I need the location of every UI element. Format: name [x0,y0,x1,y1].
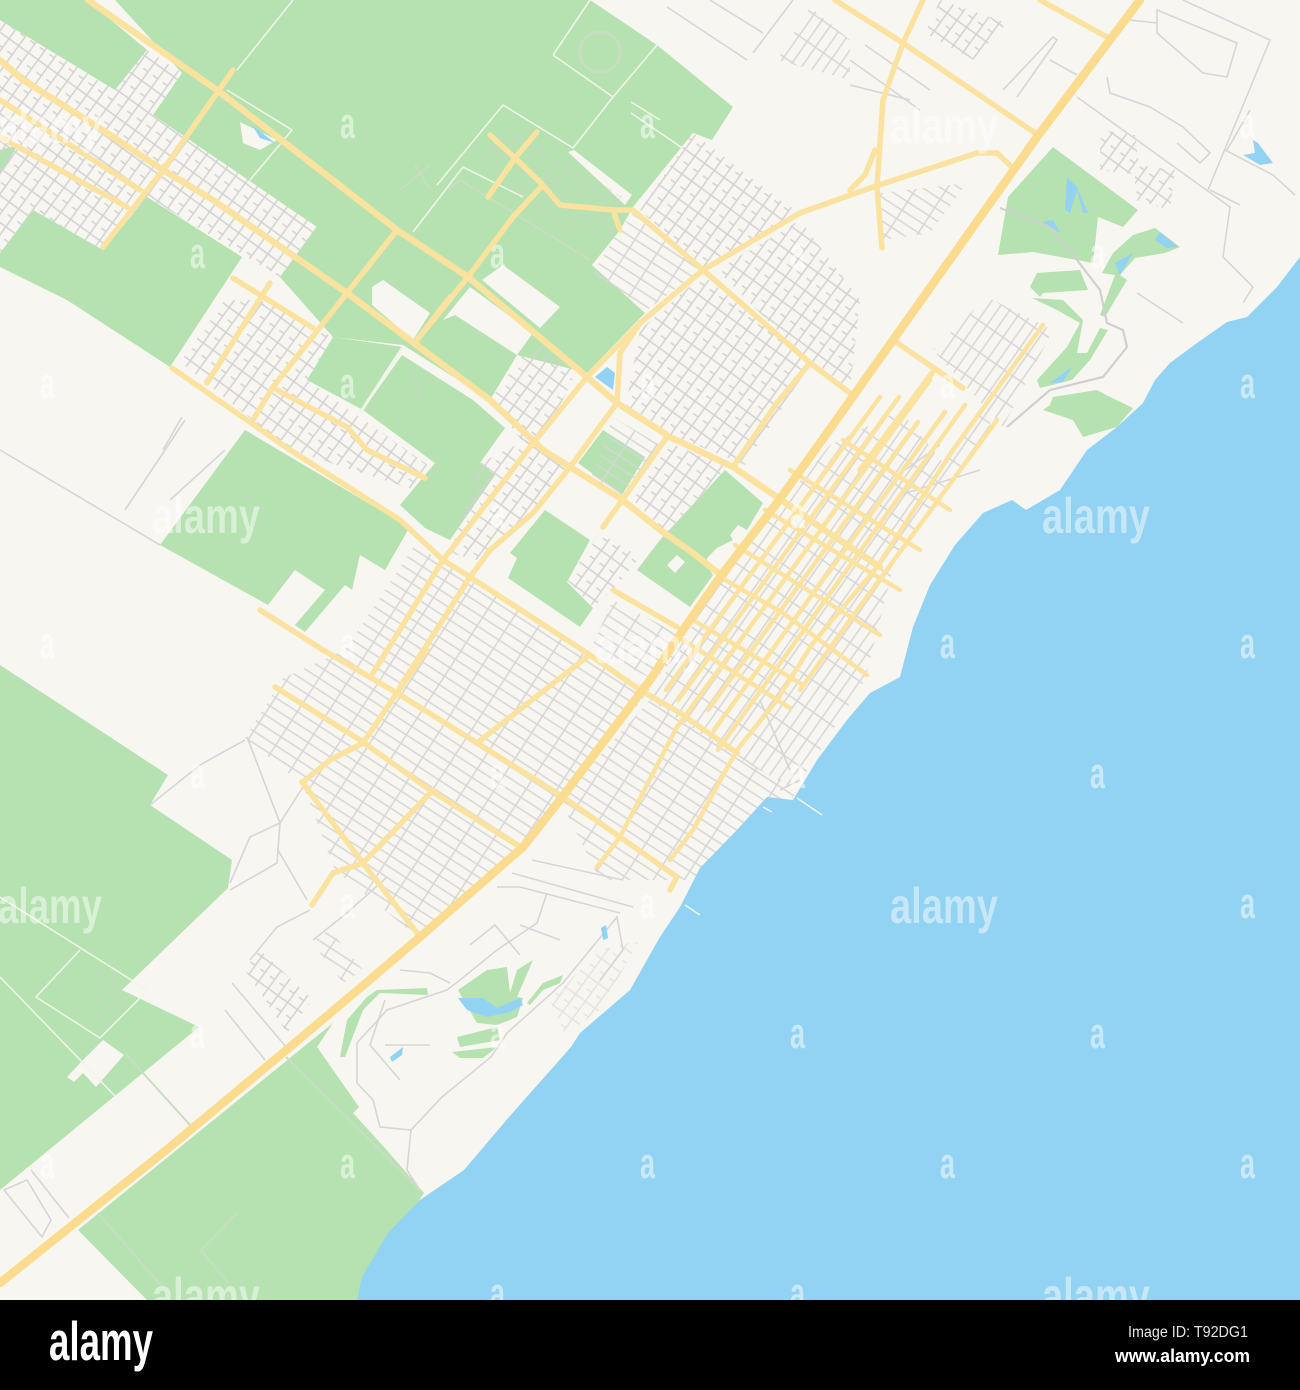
website: www.alamy.com [1114,1346,1250,1366]
watermark text: a [340,879,355,928]
golf course greens north [998,147,1138,263]
watermark text: a [490,229,505,278]
watermark text: a [1240,1139,1255,1188]
watermark text: alamy [1042,1268,1150,1324]
water bodies: lakes and ponds [252,125,1273,1062]
watermark text: a [1240,619,1255,668]
golf course greens south [458,960,533,1025]
watermark text: a [1240,99,1255,148]
watermark text: a [1090,229,1105,278]
sea [357,257,1300,1300]
watermark text: a [190,749,205,798]
watermark text: a [190,229,205,278]
watermark text: a [1240,879,1255,928]
watermark text: a [490,749,505,798]
watermark text: a [190,1009,205,1058]
image id: Image ID: T92DG1 [1128,1324,1248,1341]
watermark text: a [940,359,955,408]
golf access road [1000,208,1127,427]
watermark text: alamy [0,878,102,934]
footer logo: alamy [49,1310,153,1372]
watermark text: a [640,359,655,408]
watermark text: a [1090,749,1105,798]
watermark text: a [340,99,355,148]
watermark text: a [940,1139,955,1188]
watermark text: a [40,359,55,408]
watermark text: a [640,99,655,148]
watermark text: alamy [152,1268,260,1324]
watermark text: a [340,359,355,408]
watermark text: a [640,879,655,928]
watermark text: a [490,1269,505,1318]
watermark text: a [340,619,355,668]
watermark text: a [490,489,505,538]
footer bar [0,1300,1300,1390]
watermark text: alamy [152,488,260,544]
major yellow roads [0,0,1107,937]
watermark text: a [640,1139,655,1188]
watermark text: a [40,619,55,668]
faint street hatch in farmland [85,125,630,1035]
south-east town grid roads [597,325,1043,867]
field tracks on farmland [0,0,700,1097]
white non-farm blocks [67,122,685,1087]
residential street grids [0,0,1175,1035]
watermark text: a [940,619,955,668]
watermark text: alamy [0,98,102,154]
watermark text: a [1240,359,1255,408]
watermark text: a [790,489,805,538]
piers [685,798,822,915]
watermark text: a [490,1009,505,1058]
watermark text: a [790,749,805,798]
grey tracks and roundabout in farmland [98,32,620,1290]
watermark text: alamy [890,878,998,934]
watermark text: a [790,1269,805,1318]
watermark text: a [40,1139,55,1188]
watermark text: a [340,1139,355,1188]
watermark text: a [1090,1009,1105,1058]
watermark text: alamy [595,618,703,674]
watermark text: alamy [1042,488,1150,544]
watermark text: a [790,229,805,278]
watermark text: a [790,1009,805,1058]
watermark text: alamy [890,98,998,154]
